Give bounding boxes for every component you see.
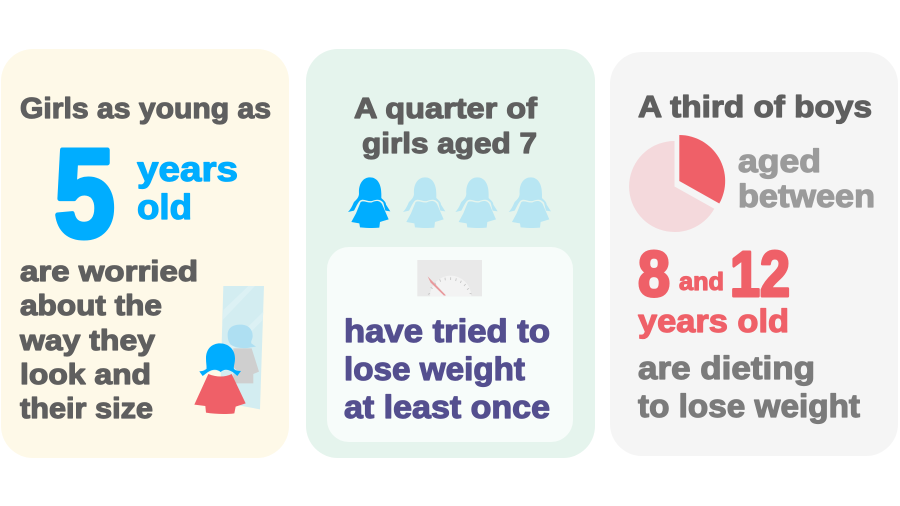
heading: a quarter of girls aged 7: A quarter of xyxy=(354,93,537,125)
text block: worried about looks: their size xyxy=(20,393,153,425)
icon: girl at mirror xyxy=(194,286,264,414)
text block: worried about looks: look and xyxy=(20,359,151,391)
text block: worried about looks: way they xyxy=(19,325,155,357)
heading: girls as young as: Girls as young as xyxy=(20,93,271,125)
age range: 8 and 12 years old xyxy=(638,238,790,339)
big number 5: 5 xyxy=(54,123,115,264)
text block: have tried to lose weight: have tried to xyxy=(344,313,550,349)
years old label: years xyxy=(137,150,238,189)
text block: have tried to lose weight: lose weight xyxy=(344,351,525,387)
years old label: old xyxy=(137,188,192,227)
text: aged between xyxy=(738,143,875,214)
panel: a third of boys xyxy=(610,52,898,456)
age range: 8 and 12 years old: 12 xyxy=(730,238,790,310)
heading: a third of boys: A third of boys xyxy=(638,89,872,124)
text block: worried about looks: are worried xyxy=(20,256,198,288)
text block: worried about looks: about the xyxy=(20,290,162,322)
panel: have tried to lose weight xyxy=(327,247,573,442)
age range: 8 and 12 years old: and xyxy=(679,268,724,296)
text: aged between: between xyxy=(738,178,875,214)
age range: 8 and 12 years old: 8 xyxy=(638,238,670,310)
text: are dieting to lose weight: are dieting xyxy=(638,350,815,386)
icon: four girls, one highlighted xyxy=(348,177,551,228)
icon: weighing scale xyxy=(417,260,482,296)
panel: a quarter of girls aged 7 xyxy=(306,49,595,458)
text: are dieting to lose weight: to lose weight xyxy=(638,388,860,424)
panel: girls as young as 5 xyxy=(1,49,289,458)
text: are dieting to lose weight xyxy=(638,350,860,424)
heading: a quarter of girls aged 7: girls aged 7 xyxy=(362,128,537,160)
text block: worried about looks xyxy=(19,256,198,425)
pie chart: one third xyxy=(629,135,725,232)
age range: 8 and 12 years old: years old xyxy=(638,303,789,339)
text block: have tried to lose weight xyxy=(344,313,550,425)
years old label xyxy=(137,150,238,227)
text block: have tried to lose weight: at least once xyxy=(344,389,550,425)
text: aged between: aged xyxy=(738,143,821,179)
heading: a quarter of girls aged 7 xyxy=(354,93,537,160)
